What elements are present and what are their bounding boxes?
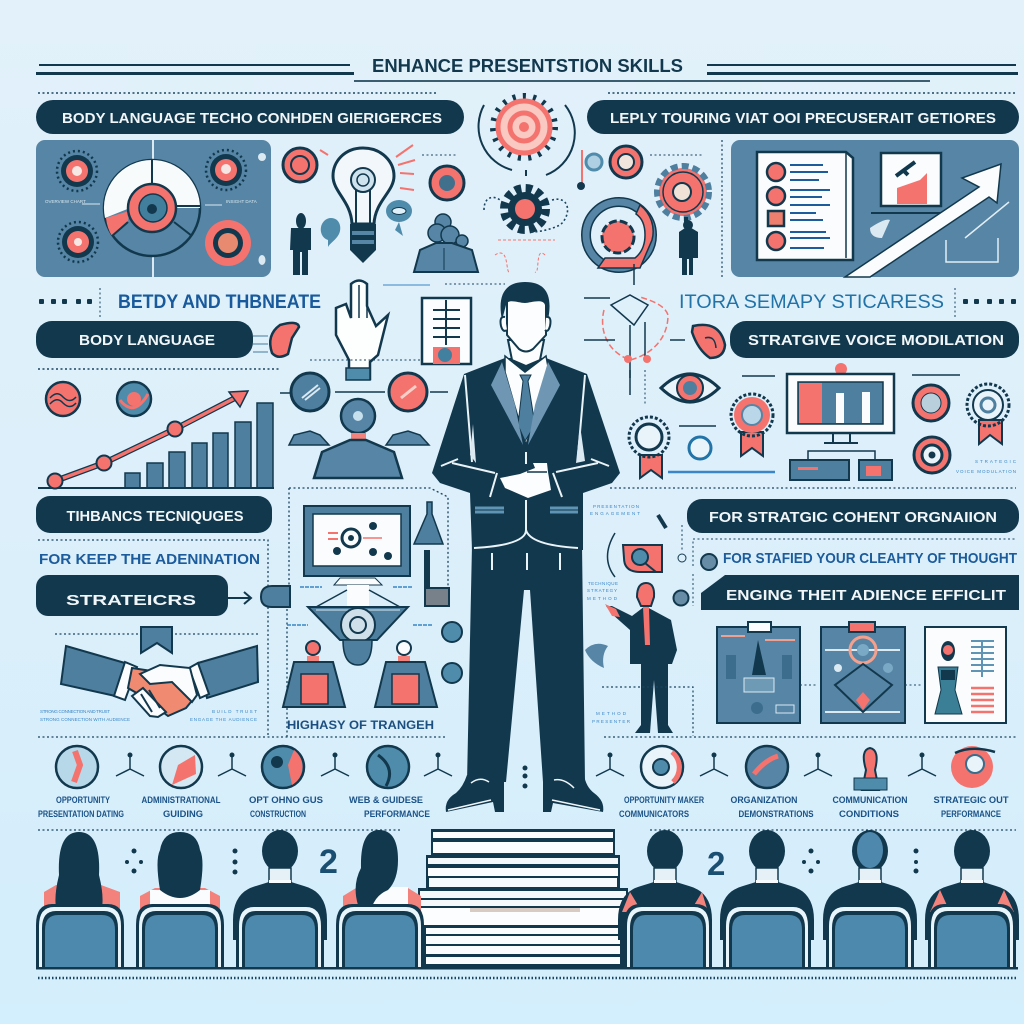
audience member 4 bbox=[336, 830, 424, 968]
dots and numbers between audience: 2 bbox=[319, 843, 338, 881]
icon: podium left bbox=[283, 641, 345, 707]
icon: connected circles bbox=[577, 150, 602, 190]
caption: right: VOICE MODULATION bbox=[956, 469, 1016, 474]
topic icon 5 bbox=[641, 746, 683, 788]
labels: bottom right: ORGANIZATION bbox=[730, 795, 798, 806]
panel: checklist and growth arrow bbox=[731, 140, 1019, 277]
heading pill: voice modulation bbox=[730, 321, 1019, 358]
panel: pie chart dashboard bbox=[36, 140, 271, 277]
dots and numbers between audience bbox=[125, 843, 918, 882]
small presenter bbox=[585, 583, 677, 733]
icon: circular arrows ring bbox=[586, 202, 653, 268]
captions: left of presenter: METHOD bbox=[596, 711, 627, 716]
caption lines under handshake: STRONG CONNECTION WITH AUDIENCE bbox=[40, 717, 130, 722]
icon: large gear bbox=[657, 166, 709, 218]
icon: circle portrait right bbox=[913, 385, 949, 421]
heading pill: top left: BODY LANGUAGE TECHO CONHDEN GIERIGERCES bbox=[62, 110, 442, 127]
icon: open book document bbox=[310, 284, 505, 364]
caption: highlight: HIGHASY OF TRANGEH bbox=[287, 720, 434, 732]
caption lines under handshake: STRONG CONNECTION AND TRUST bbox=[40, 709, 110, 714]
icon: left circle badge bbox=[46, 382, 80, 416]
lower step bbox=[418, 888, 628, 968]
captions: left of presenter: STRATEGY bbox=[587, 588, 617, 593]
audience member 3 bbox=[233, 830, 327, 968]
icon: eye bbox=[661, 374, 719, 402]
decorative dots left bbox=[39, 299, 92, 304]
icon: podium right bbox=[375, 641, 437, 707]
captions: left of presenter bbox=[587, 581, 631, 724]
foot dots bbox=[522, 766, 528, 788]
icon: raised hand bbox=[336, 280, 388, 380]
icon: coral target circle bbox=[283, 148, 328, 182]
caption lines under handshake: ENGAGE THE AUDIENCE bbox=[190, 717, 257, 722]
labels: bottom left: ADMINISTRATIONAL bbox=[142, 795, 221, 806]
panel: slide one bbox=[717, 622, 800, 723]
title bbox=[36, 56, 1018, 82]
heading pill: techniques: TIHBANCS TECNIQUGES bbox=[66, 508, 244, 525]
banner: engaging audience: ENGING THEIT ADIENCE EFFICLIT bbox=[726, 587, 1006, 604]
panel: slide two bbox=[821, 622, 905, 723]
subheading: keep the audience: FOR KEEP THE ADENINATION bbox=[39, 551, 260, 568]
chart: rising bars and trend line bbox=[38, 391, 274, 489]
labels: bottom right bbox=[619, 795, 1009, 820]
icon: award ribbon bbox=[629, 417, 669, 478]
labels: bottom right: DEMONSTRATIONS bbox=[738, 809, 814, 820]
labels: bottom right: CONDITIONS bbox=[839, 809, 899, 820]
labels: bottom right: STRATEGIC OUT bbox=[934, 795, 1009, 806]
icon: bookmark bbox=[141, 627, 172, 653]
icon: speech bubble right bbox=[386, 200, 412, 236]
arrow bbox=[228, 592, 251, 604]
audience member 5 bbox=[618, 830, 712, 968]
icon: small person right bbox=[679, 217, 698, 275]
heading pill: body language: BODY LANGUAGE bbox=[79, 332, 215, 349]
icon: handshake bbox=[61, 646, 258, 717]
icon: presenter bust with viewers bbox=[280, 373, 448, 478]
labels: bottom left: OPPORTUNITY bbox=[56, 795, 111, 806]
caption: right bbox=[956, 459, 1017, 474]
icon: desk lamp bbox=[414, 502, 449, 606]
labels: bottom right: COMMUNICATORS bbox=[619, 809, 689, 820]
tripods bbox=[116, 752, 936, 776]
heading pill: content organization bbox=[687, 499, 1019, 533]
suit jacket bbox=[432, 358, 620, 550]
subheading left: BETDY AND THBNEATE bbox=[118, 292, 321, 313]
icon: magnifier tag bbox=[608, 515, 686, 577]
title: ENHANCE PRESENTSTION SKILLS bbox=[372, 56, 683, 76]
icon: lightbulb bbox=[333, 145, 415, 263]
icon: side dots bbox=[442, 622, 462, 683]
caption lines under handshake bbox=[40, 709, 257, 722]
icon: small standing person bbox=[290, 213, 311, 275]
desktop monitor chart bbox=[742, 363, 960, 480]
topic icon 7 bbox=[854, 748, 887, 790]
labels: bottom left: CONSTRUCTION bbox=[250, 809, 306, 820]
icon: audience bust bbox=[414, 214, 478, 272]
tie bbox=[518, 375, 535, 441]
decorative dots right bbox=[963, 299, 1016, 304]
icon: award ribbon coral bbox=[731, 394, 773, 456]
lapels bbox=[491, 362, 560, 445]
bar chart card bbox=[871, 153, 941, 214]
labels: bottom right: OPPORTUNITY MAKER bbox=[624, 795, 704, 806]
heading pill: top right bbox=[587, 100, 1019, 134]
icon: ear right bbox=[692, 325, 725, 358]
icon: central target with rays bbox=[479, 97, 575, 176]
heading pill: strategies bbox=[36, 575, 228, 616]
icon: dot bottom bbox=[674, 590, 688, 606]
heading pill: body language bbox=[36, 321, 253, 358]
audience: right group bbox=[618, 830, 1019, 968]
hands bbox=[500, 463, 551, 498]
caption: upper side: PRESENTATION bbox=[593, 504, 639, 509]
topic icon 8 bbox=[951, 746, 995, 788]
labels: bottom left: GUIDING bbox=[163, 809, 203, 820]
labels: bottom left: PRESENTATION DATING bbox=[38, 809, 124, 820]
topic icon 2 bbox=[160, 746, 202, 788]
growth arrow bbox=[845, 164, 1001, 277]
heading pill: techniques bbox=[36, 496, 272, 533]
monitor on stand bbox=[287, 506, 433, 665]
subheading right: ITORA SEMAPY STICARESS bbox=[679, 292, 944, 313]
panel: pie chart dashboard: INSIGHT DATA bbox=[226, 199, 257, 204]
shoes bbox=[446, 775, 603, 812]
trousers bbox=[467, 545, 585, 782]
audience member 8 bbox=[925, 830, 1019, 968]
dots and numbers between audience: 2 bbox=[707, 845, 725, 882]
heading pill: voice modulation: STRATGIVE VOICE MODILATION bbox=[748, 332, 1004, 349]
heading pill: top right: LEPLY TOURING VIAT OOI PRECUSERAIT GETIORES bbox=[610, 110, 996, 127]
audience member 1 bbox=[36, 832, 124, 968]
labels: bottom left: WEB & GUIDESE bbox=[349, 795, 423, 806]
icon: coral portrait circle bbox=[610, 146, 702, 178]
icon: central gear bbox=[484, 190, 568, 272]
topic icon 4 bbox=[367, 746, 409, 788]
audience member 7 bbox=[823, 830, 917, 968]
neck and face bbox=[508, 340, 544, 366]
audience member 6 bbox=[720, 830, 814, 968]
labels: bottom left: PERFORMANCE bbox=[364, 809, 430, 820]
suit highlights bbox=[441, 375, 609, 570]
caption: upper side: ENGAGEMENT bbox=[590, 511, 640, 516]
panel: slide three with figure bbox=[925, 627, 1006, 723]
caption lines under handshake: BUILD TRUST bbox=[212, 709, 257, 714]
icon: coral circle with portrait bbox=[422, 155, 464, 200]
icon: dot top bbox=[701, 554, 717, 570]
icon: spiral circle right bbox=[914, 437, 950, 473]
panel: pie chart dashboard: OVERVIEW CHART bbox=[45, 199, 86, 204]
upper step bbox=[431, 829, 615, 855]
heading pill: content organization: FOR STRATGIC COHENT ORGNAIION bbox=[709, 509, 997, 526]
audience member 2 bbox=[136, 832, 224, 968]
shirt bbox=[505, 356, 549, 445]
labels: bottom left: OPT OHNO GUS bbox=[249, 795, 323, 806]
caption: right: STRATEGIC bbox=[975, 459, 1017, 464]
labels: bottom right: PERFORMANCE bbox=[941, 809, 1001, 820]
small arrow and blue icon bbox=[668, 426, 775, 472]
donut chart bbox=[104, 160, 200, 256]
icon: eye badge bbox=[117, 382, 151, 416]
topic icon 1 bbox=[56, 746, 98, 788]
labels: bottom right: COMMUNICATION bbox=[832, 795, 908, 806]
hair bbox=[501, 282, 550, 320]
icon: speech bubble left bbox=[321, 218, 340, 247]
topic icon 6 bbox=[746, 746, 788, 788]
heading pill: strategies: STRATEICRS bbox=[66, 592, 196, 609]
labels: bottom left bbox=[38, 795, 430, 820]
captions: left of presenter: TECHNIQUE bbox=[588, 581, 618, 586]
topic icon 3 bbox=[262, 746, 304, 788]
stage steps bbox=[418, 829, 628, 968]
heading pill: top left bbox=[36, 100, 464, 134]
icon: award ribbon right bbox=[967, 384, 1009, 444]
central presenter figure bbox=[432, 282, 620, 812]
banner: engaging audience bbox=[701, 575, 1019, 610]
audience: left group bbox=[36, 830, 424, 968]
caption: upper side bbox=[590, 504, 640, 516]
checklist document bbox=[757, 152, 853, 260]
diagram: network hexagon bbox=[584, 264, 685, 378]
icon: capsule bbox=[261, 586, 290, 607]
captions: left of presenter: METHOD bbox=[587, 596, 618, 601]
icon: ear left bbox=[253, 323, 299, 357]
middle step bbox=[426, 855, 620, 888]
icon row: bottom right circles bbox=[641, 746, 995, 790]
captions: left of presenter: PRESENTER bbox=[592, 719, 631, 724]
icon row: bottom left circles bbox=[56, 746, 409, 788]
